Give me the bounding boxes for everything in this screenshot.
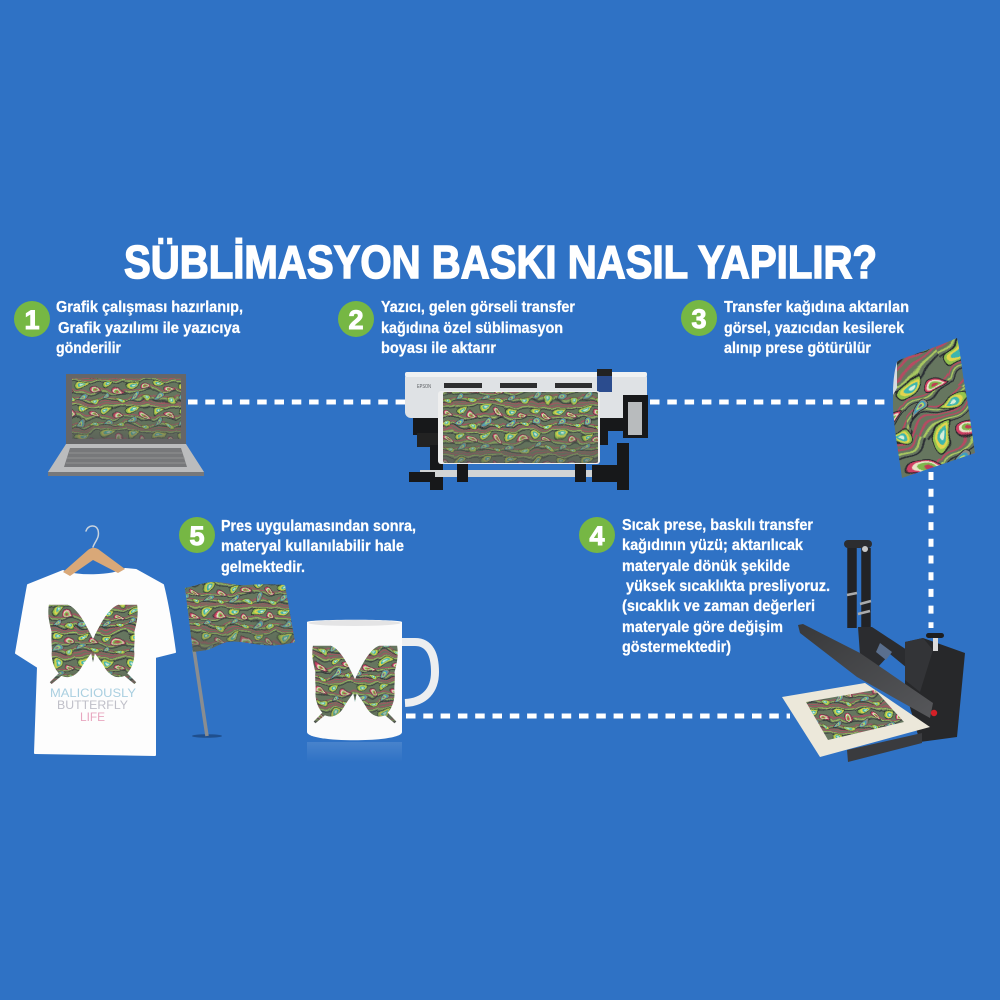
step 5 text (221, 518, 416, 576)
step 5 (179, 517, 416, 576)
step 2 text (381, 299, 575, 357)
step 4 text: kağıdının yüzü; aktarılıcak (622, 537, 803, 554)
step 4 text: yüksek sıcaklıkta presliyoruz. (626, 578, 830, 595)
step 2 text: boyası ile aktarır (381, 340, 496, 357)
step 4 text: (sıcaklık ve zaman değerleri (622, 598, 815, 615)
dashed connector: transfer sheet to heat press (928, 472, 934, 628)
butterfly print on shirt (48, 604, 138, 684)
step 3 badge: 3 (691, 304, 707, 334)
dashed connector: heat press to mug (406, 714, 790, 718)
step 3 badge (681, 300, 717, 336)
step 1 text (56, 299, 243, 357)
step 5 text: gelmektedir. (221, 559, 305, 576)
dashed connector: printer to transfer sheet (650, 400, 888, 404)
shirt slogan (50, 686, 136, 724)
step 4 text: materyale dönük şekilde (622, 558, 790, 575)
title: SÜBLİMASYON BASKI NASIL YAPILIR? (124, 236, 877, 288)
dashed connector: laptop to printer (188, 400, 406, 404)
step 2 badge (338, 301, 374, 337)
icon: t-shirt with butterfly print (16, 526, 175, 755)
butterfly print on mug (312, 646, 398, 724)
step 4 badge: 4 (589, 521, 605, 551)
icon: laptop (48, 366, 204, 476)
step 1 text: Grafik çalışması hazırlanıp, (56, 299, 243, 316)
step 3 text: Transfer kağıdına aktarılan (724, 299, 909, 316)
step 2 text: Yazıcı, gelen görseli transfer (381, 299, 575, 316)
step 1 text: gönderilir (56, 340, 121, 357)
step 2 (338, 299, 575, 357)
step 1 text: Grafik yazılımı ile yazıcıya (58, 320, 240, 337)
step 5 text: materyal kullanılabilir hale (221, 538, 404, 555)
step 4 text: materyale göre değişim (622, 619, 783, 636)
icon: large format printer (405, 369, 648, 490)
step 4 badge (579, 517, 615, 553)
shirt slogan: BUTTERFLY (57, 698, 128, 712)
step 4 text: göstermektedir) (622, 639, 731, 656)
step 1 badge (14, 301, 50, 337)
icon: printed transfer sheet (893, 338, 975, 478)
step 1 badge: 1 (24, 305, 40, 335)
icon: printed flag (185, 582, 295, 738)
step 5 text: Pres uygulamasından sonra, (221, 518, 416, 535)
step 3 text: görsel, yazıcıdan kesilerek (724, 320, 904, 337)
step 2 badge: 2 (348, 305, 364, 335)
icon: heat press (782, 544, 965, 762)
step 4 text: Sıcak prese, baskılı transfer (622, 517, 813, 534)
shirt slogan: MALICIOUSLY (50, 686, 136, 700)
step 5 badge (179, 517, 215, 553)
hanger (63, 526, 125, 576)
step 3 text: alınıp prese götürülür (724, 340, 871, 357)
step 3 text (724, 299, 909, 357)
step 4 (579, 517, 830, 656)
step 3 (681, 299, 909, 357)
printer brand label: EPSON (417, 384, 431, 390)
step 2 text: kağıdına özel süblimasyon (381, 320, 563, 337)
step 4 text (622, 517, 830, 656)
step 5 badge: 5 (189, 521, 205, 551)
shirt slogan: LIFE (80, 710, 105, 724)
icon: printed mug (305, 620, 435, 762)
step 1 (14, 299, 243, 357)
